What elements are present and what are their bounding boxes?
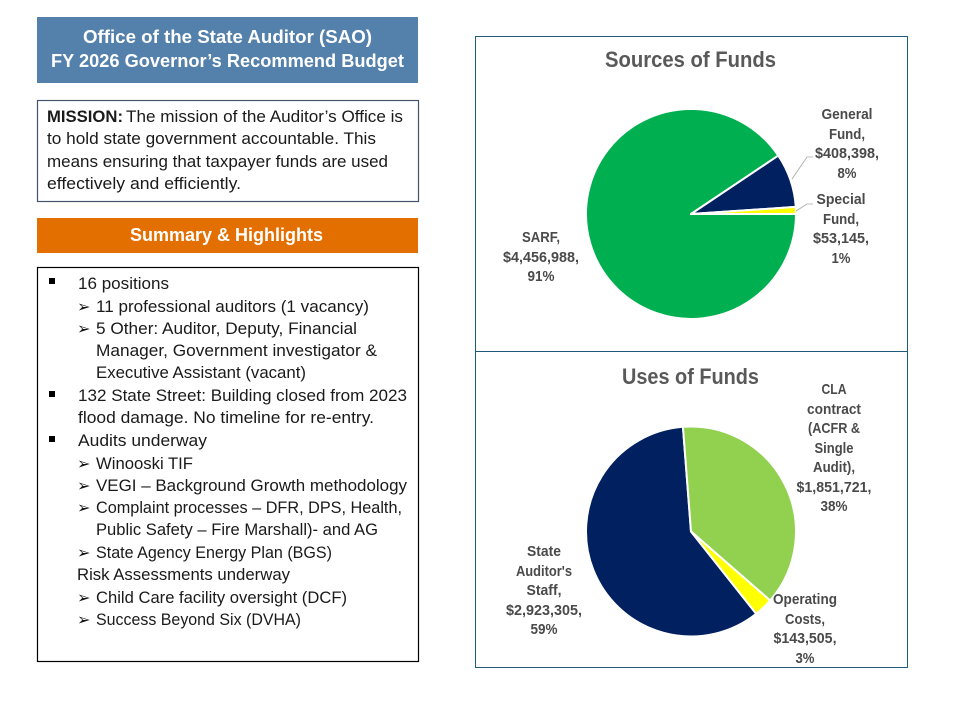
audits underway list: ➢ xyxy=(77,454,90,473)
audits underway list: Complaint processes – DFR, DPS, Health, xyxy=(96,499,402,517)
mission statement box: The mission of the Auditor’s Office is xyxy=(126,108,403,126)
panel: sources of funds xyxy=(476,36,908,352)
mission statement box: means ensuring that taxpayer funds are used xyxy=(47,153,388,171)
label: CLA contract: Audit), xyxy=(813,459,855,476)
label: state auditor's staff: Auditor's xyxy=(516,563,572,580)
leader line: special fund xyxy=(796,204,813,211)
audits underway list xyxy=(49,432,408,562)
risk assessments list: ➢ xyxy=(77,610,90,629)
label: CLA contract: Single xyxy=(814,440,854,457)
label: general fund: $408,398, xyxy=(815,145,879,162)
label: operating costs xyxy=(773,591,837,667)
label: state auditor's staff: 59% xyxy=(530,621,558,638)
label: state auditor's staff: Staff, xyxy=(526,582,562,599)
audits underway list: ➢ xyxy=(77,476,90,495)
positions list: ➢ xyxy=(77,319,90,338)
risk assessments list: Risk Assessments underway xyxy=(77,566,291,584)
label: operating costs: 3% xyxy=(796,650,814,667)
label: special fund: $53,145, xyxy=(813,230,869,247)
positions list: 11 professional auditors (1 vacancy) xyxy=(96,298,369,316)
risk assessments list: Child Care facility oversight (DCF) xyxy=(96,589,347,607)
heading: sources of funds: Sources of Funds xyxy=(605,47,776,72)
label: special fund: Fund, xyxy=(823,211,859,228)
label: state auditor's staff xyxy=(506,543,582,638)
title banner: FY 2026 Governor’s Recommend Budget xyxy=(51,50,404,71)
audits underway list: ➢ xyxy=(77,498,90,517)
title banner xyxy=(37,17,418,83)
leader line: general fund xyxy=(792,157,813,179)
label: CLA contract: 38% xyxy=(820,498,848,515)
building note: flood damage. No timeline for re-entry. xyxy=(78,409,374,427)
positions list: Executive Assistant (vacant) xyxy=(96,364,306,382)
label: SARF: 91% xyxy=(528,268,554,285)
mission statement box: effectively and efficiently. xyxy=(47,175,241,193)
positions list xyxy=(49,275,377,382)
pie chart: sources xyxy=(586,109,796,319)
highlights list panel xyxy=(38,268,418,662)
label: CLA contract: contract xyxy=(807,401,861,418)
risk assessments list: Success Beyond Six (DVHA) xyxy=(96,611,301,629)
label: operating costs: $143,505, xyxy=(774,630,836,647)
audits underway list: VEGI – Background Growth methodology xyxy=(96,477,408,495)
positions list: 5 Other: Auditor, Deputy, Financial xyxy=(96,320,357,338)
label: general fund: 8% xyxy=(838,165,856,182)
label: operating costs: Operating xyxy=(773,591,837,608)
label: special fund: Special xyxy=(816,191,866,208)
label: SARF xyxy=(503,229,579,285)
heading: uses of funds: Uses of Funds xyxy=(622,364,759,389)
summary heading bar: Summary & Highlights xyxy=(130,224,323,245)
label: state auditor's staff: State xyxy=(527,543,561,560)
mission statement box: MISSION: xyxy=(47,108,123,126)
label: special fund xyxy=(813,191,869,267)
positions list: Manager, Government investigator & xyxy=(96,342,377,360)
audits underway list: Audits underway xyxy=(78,432,208,450)
title banner: Office of the State Auditor (SAO) xyxy=(83,26,372,47)
label: CLA contract: $1,851,721, xyxy=(796,479,872,496)
label: state auditor's staff: $2,923,305, xyxy=(506,602,582,619)
label: general fund: Fund, xyxy=(829,126,865,143)
label: CLA contract xyxy=(796,381,872,515)
label: CLA contract: CLA xyxy=(822,381,847,398)
audits underway list: State Agency Energy Plan (BGS) xyxy=(96,544,332,562)
audits underway list: ➢ xyxy=(77,543,90,562)
summary heading bar xyxy=(37,218,418,253)
risk assessments list xyxy=(77,566,347,629)
label: SARF: $4,456,988, xyxy=(503,249,579,266)
risk assessments list: ➢ xyxy=(77,588,90,607)
label: general fund: General xyxy=(822,106,872,123)
pie chart: uses xyxy=(586,426,796,636)
positions list: 16 positions xyxy=(78,275,169,293)
audits underway list: Winooski TIF xyxy=(96,455,193,473)
label: SARF: SARF, xyxy=(522,229,560,246)
building note xyxy=(49,387,407,427)
mission statement box xyxy=(38,100,418,202)
label: CLA contract: (ACFR & xyxy=(808,420,860,437)
mission statement box: to hold state government accountable. This xyxy=(47,130,376,148)
panel: uses of funds xyxy=(476,352,908,668)
positions list: ➢ xyxy=(77,297,90,316)
label: general fund xyxy=(815,106,879,182)
label: operating costs: Costs, xyxy=(785,611,825,628)
audits underway list: Public Safety – Fire Marshall)- and AG xyxy=(96,521,378,539)
building note: 132 State Street: Building closed from 2023 xyxy=(78,387,407,405)
label: special fund: 1% xyxy=(832,250,850,267)
